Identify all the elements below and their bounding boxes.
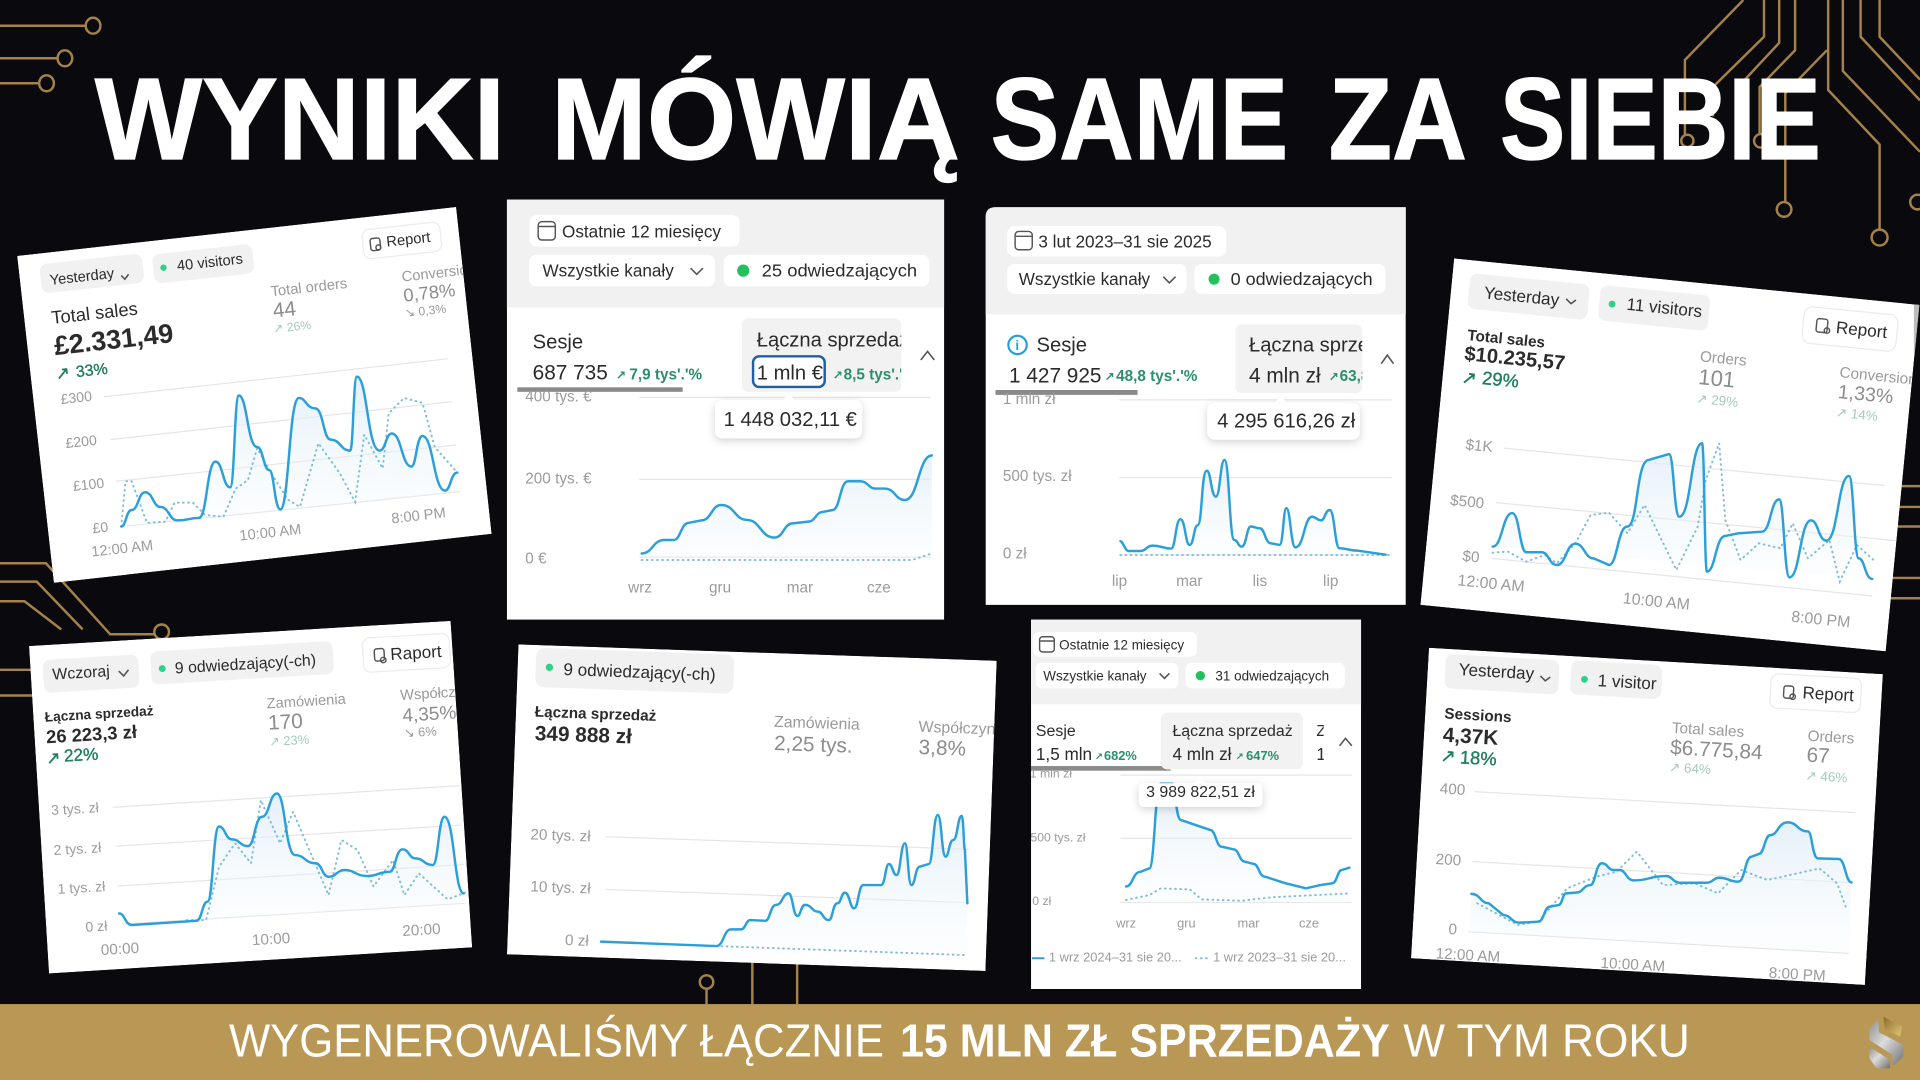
kpi: conversion: Conversion: [401, 262, 477, 286]
clipped third metric: [1316, 723, 1402, 764]
banner text: WYGENEROWALIŚMY ŁĄCZNIE: [229, 1015, 884, 1067]
line chart: 20:00: [402, 921, 441, 940]
kpi: total sales: [51, 304, 172, 380]
banner text: [229, 1015, 1690, 1067]
kpi: total sales: [1669, 720, 1763, 777]
line chart: 0 zł: [565, 932, 590, 950]
period pill: Yesterday: [49, 266, 116, 289]
kpi: conversion: ↗ 14%: [1835, 405, 1878, 424]
kpi: conversion: Conversion: [1839, 364, 1917, 389]
kpi: orders: Orders: [1807, 728, 1855, 748]
line chart: 20 tys. zł: [530, 826, 592, 846]
date pill: [1007, 226, 1226, 257]
visitors pill: 0 odwiedzających: [1231, 269, 1373, 289]
title: WYNIKI: [95, 54, 505, 184]
line chart: 0: [1448, 921, 1457, 939]
visitors pill: [1598, 285, 1711, 331]
panel: card 6 growth chart: [507, 644, 1016, 971]
title: [95, 54, 1821, 184]
kpi: orders: 101: [1697, 364, 1736, 393]
line chart: [530, 815, 969, 955]
selected metric tab: [742, 318, 917, 392]
title: SAME: [991, 54, 1288, 184]
visitors pill: [1185, 663, 1345, 688]
circuit traces: right middle: [1873, 486, 1920, 598]
selected metric tab: Łączna sprzedaż: [1172, 723, 1293, 740]
title: ZA: [1329, 54, 1467, 184]
tooltip: 1 448 032,11 €: [724, 409, 857, 431]
kpi: orders: Zamówienia: [266, 692, 347, 712]
selected metric tab: 1 mln €: [757, 363, 823, 385]
kpi: conversion: 3,8%: [918, 736, 966, 761]
kpi: total orders: Total orders: [270, 276, 348, 300]
selected metric tab: 63,8 tys: [1340, 368, 1396, 385]
line chart: 3 tys. zł: [51, 799, 100, 818]
line chart: 400 tys. €: [525, 389, 592, 406]
visitors pill: [1570, 660, 1663, 699]
line chart: cze: [1299, 915, 1319, 930]
kpi: orders: Zamówienia: [774, 714, 860, 734]
line chart: 8:00 PM: [1790, 609, 1851, 631]
tooltip: [1139, 776, 1262, 807]
line chart: 400: [1439, 780, 1466, 799]
sessions metric: [996, 334, 1198, 395]
sessions metric: [517, 331, 703, 392]
kpi: total sales: 33%: [75, 361, 109, 381]
kpi: total orders: 44: [272, 297, 297, 323]
kpi: orders: ↗ 29%: [1696, 391, 1739, 410]
selected metric tab: ↗: [833, 369, 843, 383]
kpi: total orders: [270, 280, 347, 332]
line chart: 0 zł: [85, 918, 109, 935]
kpi: total sales: Łączna sprzedaż: [534, 704, 657, 725]
line chart: mar: [787, 580, 813, 597]
legend: 1 wrz 2024–31 sie 20...: [1049, 950, 1182, 965]
panel: card 1 total sales yesterday: [17, 207, 492, 583]
visitors pill: 25 odwiedzających: [762, 261, 917, 281]
kpi: total orders: ↗ 26%: [272, 318, 312, 336]
kpi: orders: 170: [267, 710, 303, 735]
line chart: 8:00 PM: [1768, 965, 1826, 985]
kpi: total sales: [1463, 330, 1565, 388]
selected metric tab: 4 mln zł: [1172, 744, 1232, 764]
circuit traces: top right: [1681, 0, 1920, 246]
tooltip: 3 989 822,51 zł: [1146, 784, 1255, 801]
kpi: conversion: Współczynnik: [400, 683, 491, 704]
line chart: [1030, 767, 1352, 930]
visitors pill: 40 visitors: [176, 251, 244, 275]
kpi: total sales: Total sales: [50, 298, 139, 328]
kpi: total sales: £2.331,49: [52, 318, 175, 361]
kpi: orders: Orders: [1699, 348, 1748, 370]
selected metric tab: 647%: [1246, 748, 1280, 763]
line chart: 00:00: [100, 940, 140, 959]
selected metric tab: Łączna sprzedaż: [757, 330, 909, 352]
period pill: Yesterday: [1458, 659, 1535, 683]
kpi: orders: 2,25 tys.: [774, 732, 853, 758]
sessions metric: Sesje: [1036, 723, 1076, 740]
sessions metric: 1 427 925: [1009, 365, 1102, 388]
visitors pill: 9 odwiedzający(-ch): [174, 652, 317, 677]
period pill: [1444, 654, 1560, 695]
sessions metric: 682%: [1104, 748, 1137, 763]
kpi: conversion: 4,35%: [402, 703, 457, 727]
line chart: mar: [1237, 915, 1260, 930]
kpi: total sales: 22%: [63, 744, 99, 766]
line chart: 12:00 AM: [91, 538, 154, 561]
kpi: total sales: 349 888 zł: [534, 722, 633, 748]
selected metric tab: Łączna sprzedaż: [1249, 334, 1402, 356]
line chart: 0 zł: [1032, 894, 1052, 908]
kpi: conversion: ↘ 6%: [403, 723, 437, 740]
icon: logo: [1869, 1017, 1903, 1068]
info icon: i: [1015, 338, 1019, 353]
kpi: total sales: Łączna sprzedaż: [44, 703, 154, 725]
date pill: Ostatnie 12 miesięcy: [562, 222, 721, 242]
kpi: total sales: ↗: [55, 362, 71, 384]
channels pill: [529, 255, 715, 287]
title: MÓWIĄ: [551, 54, 960, 184]
visitors pill: [724, 255, 929, 287]
kpi: orders: [1805, 728, 1855, 785]
sessions metric: 1,5 mln: [1036, 744, 1092, 764]
kpi: sessions: 4,37K: [1442, 724, 1499, 750]
channels pill: [1007, 264, 1187, 294]
line chart: £200: [65, 432, 98, 451]
visitors pill: 31 odwiedzających: [1215, 668, 1329, 683]
kpi: total sales: 29%: [1481, 367, 1520, 392]
period pill: [42, 654, 140, 693]
report button: [1769, 673, 1862, 713]
selected metric tab: 8,5 tys'.'%: [844, 367, 917, 384]
line chart: 1 mln zł: [1003, 391, 1056, 408]
line chart: 10 tys. zł: [530, 878, 592, 898]
kpi: total sales: Total sales: [1671, 720, 1745, 741]
clipped third metric: Zamówienia: [1316, 723, 1402, 740]
panel: card 3 date range zloty: [986, 207, 1406, 605]
line chart: [60, 359, 460, 561]
circuit traces: bottom: [700, 961, 797, 1004]
kpi: total sales: $6.775,84: [1670, 736, 1763, 764]
kpi: orders: ↗ 46%: [1805, 768, 1848, 785]
visitors pill: [150, 641, 334, 685]
line chart: 10:00 AM: [239, 522, 302, 545]
date pill: [1033, 632, 1197, 657]
panel: card 7 last 12 months zloty: [1031, 620, 1362, 989]
kpi: sessions: ↗: [1440, 745, 1456, 767]
line chart: $500: [1449, 492, 1485, 512]
circuit traces: left middle: [0, 563, 169, 696]
sessions metric: ↗: [616, 369, 626, 383]
sessions metric: [1031, 723, 1171, 771]
sessions metric: ↗: [1095, 752, 1103, 763]
visitors pill: 11 visitors: [1626, 294, 1703, 321]
line chart: [1449, 436, 1896, 631]
kpi: orders: [774, 714, 860, 758]
line chart: wrz: [627, 580, 652, 597]
report button: Report: [386, 230, 431, 251]
sessions metric: 7,9 tys'.'%: [629, 367, 703, 384]
kpi: orders: [1698, 351, 1746, 407]
report button: [362, 633, 451, 673]
visitors pill: [535, 648, 735, 694]
banner text: W TYM ROKU: [1403, 1015, 1690, 1067]
channels pill: [1036, 663, 1178, 688]
date pill: Ostatnie 12 miesięcy: [1059, 637, 1184, 652]
kpi: total sales: [44, 706, 154, 764]
period pill: Wczoraj: [52, 663, 110, 684]
collapse chevron: [1340, 738, 1352, 746]
panel: card 4 total sales dollars: [1420, 258, 1920, 651]
kpi: conversion: [402, 264, 464, 316]
tooltip: 4 295 616,26 zł: [1217, 410, 1356, 432]
line chart: 0 zł: [1003, 545, 1027, 562]
sessions metric: 687 735: [533, 362, 608, 385]
sessions metric: ↗: [1104, 370, 1115, 384]
line chart: 8:00 PM: [391, 505, 447, 527]
legend: [1032, 950, 1346, 965]
sessions metric: 48,8 tys'.'%: [1116, 368, 1198, 385]
channels pill: Wszystkie kanały: [542, 261, 674, 281]
line chart: [51, 786, 465, 959]
kpi: conversion: Współczynnik: [918, 719, 1016, 739]
sessions metric: Sesje: [533, 331, 583, 353]
line chart: [525, 389, 932, 597]
channels pill: Wszystkie kanały: [1019, 269, 1151, 289]
line chart: 12:00 AM: [1435, 945, 1501, 966]
tooltip: [1207, 396, 1360, 440]
collapse chevron: [921, 351, 934, 360]
line chart: £100: [72, 475, 105, 494]
kpi: conversion: [400, 687, 456, 737]
report button: Raport: [390, 641, 442, 664]
kpi: orders: [267, 694, 346, 746]
selected metric tab: [1236, 324, 1362, 393]
panel: card 2 last 12 months euro: [507, 200, 944, 620]
kpi: total sales: Total sales: [1467, 327, 1546, 352]
line chart: 2 tys. zł: [53, 839, 103, 858]
sessions metric: Sesje: [1037, 334, 1087, 356]
line chart: 500 tys. zł: [1003, 468, 1072, 485]
report button: [361, 222, 442, 259]
kpi: total sales: $10.235,57: [1463, 343, 1566, 375]
line chart: 0 €: [525, 550, 547, 567]
period pill: [39, 253, 145, 294]
line chart: lip: [1323, 573, 1338, 590]
kpi: sessions: Sessions: [1444, 705, 1512, 726]
line chart: 1 tys. zł: [57, 878, 107, 897]
kpi: total sales: [534, 706, 656, 744]
selected metric tab: 4 mln zł: [1249, 365, 1321, 388]
kpi: conversion: [918, 720, 994, 758]
selected metric tab: ↗: [1236, 752, 1244, 763]
line chart: 200: [1435, 851, 1462, 869]
line chart: $1K: [1465, 436, 1494, 456]
line chart: 12:00 AM: [1457, 572, 1525, 596]
line chart: wrz: [1115, 915, 1136, 930]
period pill: [1467, 273, 1590, 320]
report button: Report: [1835, 317, 1888, 342]
kpi: conversion: 0,78%: [402, 279, 456, 306]
line chart: $0: [1462, 548, 1480, 566]
kpi: sessions: 18%: [1459, 746, 1497, 769]
line chart: 500 tys. zł: [1030, 831, 1086, 845]
visitors pill: [1194, 264, 1386, 294]
line chart: gru: [1177, 915, 1196, 930]
kpi: conversion: 1,33%: [1837, 381, 1894, 408]
tooltip: [715, 393, 862, 438]
line chart: cze: [867, 580, 891, 597]
line chart: 10:00: [251, 930, 291, 949]
line chart: 200 tys. €: [525, 471, 592, 488]
line chart: gru: [709, 580, 731, 597]
panel: card 8 sessions: [1411, 648, 1883, 985]
kpi: conversion: [1838, 367, 1912, 421]
line chart: lis: [1253, 573, 1267, 590]
kpi: total sales: 26 223,3 zł: [46, 721, 137, 747]
channels pill: Wszystkie kanały: [1043, 668, 1147, 683]
visitors pill: [152, 244, 255, 284]
date pill: 3 lut 2023–31 sie 2025: [1038, 231, 1212, 251]
line chart: [1003, 391, 1392, 590]
collapse chevron: [1381, 355, 1393, 364]
line chart: mar: [1176, 573, 1202, 590]
line chart: £300: [60, 388, 93, 407]
line chart: 10:00 AM: [1600, 955, 1666, 975]
kpi: orders: ↗ 23%: [269, 732, 310, 749]
date pill: [530, 215, 740, 247]
selected metric tab: ↗: [1329, 370, 1339, 384]
info icon: [1008, 336, 1027, 354]
line chart: 1 mln zł: [1030, 767, 1072, 781]
line chart: [1435, 780, 1856, 985]
visitors pill: 9 odwiedzający(-ch): [563, 659, 716, 684]
kpi: sessions: [1440, 705, 1512, 769]
line chart: 10:00 AM: [1622, 590, 1691, 614]
visitors pill: 1 visitor: [1597, 670, 1657, 693]
kpi: orders: 67: [1806, 744, 1830, 768]
period pill: Yesterday: [1483, 282, 1561, 310]
kpi: total sales: ↗: [1460, 366, 1478, 389]
circuit traces: top left: [0, 18, 100, 91]
clipped third metric: 12: [1316, 744, 1335, 764]
kpi: total sales: ↗ 64%: [1669, 760, 1711, 777]
legend: 1 wrz 2023–31 sie 20...: [1213, 950, 1346, 965]
kpi: total sales: ↗: [46, 747, 61, 768]
kpi: conversion: ↘ 0,3%: [404, 302, 447, 320]
line chart: lip: [1112, 573, 1127, 590]
bottom banner: [0, 1004, 1920, 1080]
line chart: £0: [92, 519, 109, 536]
report button: Report: [1802, 682, 1855, 705]
panel: card 5 total sales zloty yesterday: [29, 621, 491, 973]
selected metric tab: [1161, 713, 1303, 769]
report button: [1801, 306, 1899, 352]
scrollbar: [1914, 304, 1920, 353]
title: SIEBIE: [1500, 54, 1821, 184]
banner text: 15 MLN ZŁ SPRZEDAŻY: [900, 1015, 1390, 1067]
